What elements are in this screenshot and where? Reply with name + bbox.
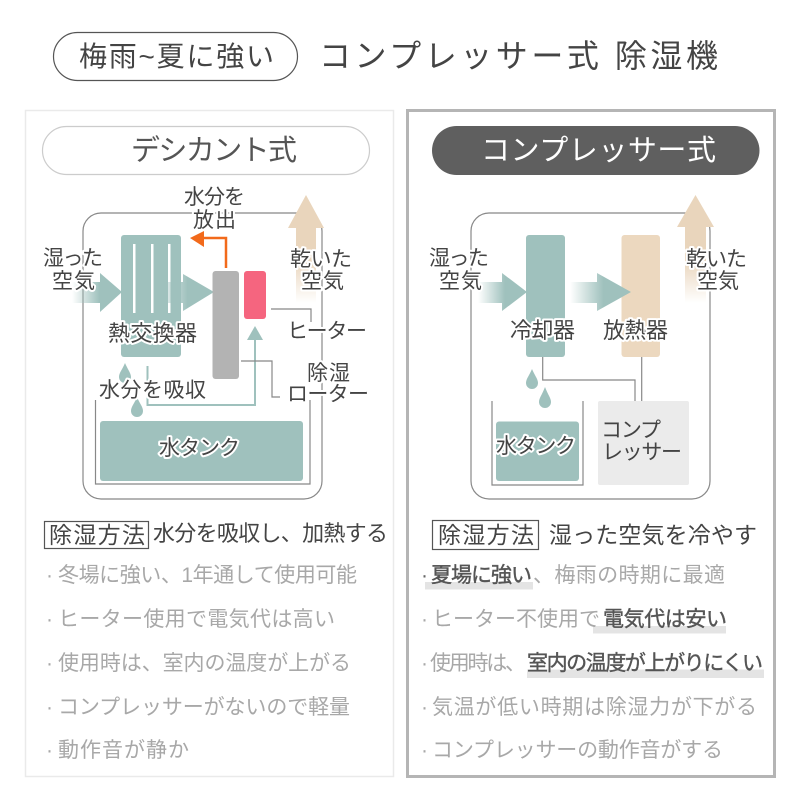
label: 水分を吸収: 水分を吸収	[99, 379, 206, 402]
label: 湿った空気	[43, 247, 103, 293]
method: 湿った空気を冷やす	[432, 520, 757, 550]
feature list: compressor: ·	[421, 564, 428, 587]
water drops	[119, 363, 143, 417]
label: 除湿ローター: 除湿	[307, 362, 350, 385]
method: 水分を吸収し、加熱する	[44, 521, 388, 548]
label: 水分を放出	[184, 186, 245, 232]
feature list: desiccant: コンプレッサーがないので軽量	[58, 696, 350, 719]
desiccant rotor	[212, 271, 239, 379]
panel: デシカント式	[26, 110, 394, 776]
water tank	[496, 422, 579, 481]
title pill: 梅雨~夏に強い	[54, 32, 298, 80]
title: コンプレッサー式 除湿機	[319, 38, 718, 74]
feature list: compressor: ヒーター不使用で	[432, 608, 600, 631]
label: 乾いた空気: 乾いた	[290, 248, 352, 271]
feature list: compressor: 気温が低い時期は除湿力が下がる	[432, 696, 757, 719]
label: コンプレッサー: レッサー	[602, 441, 682, 464]
feature list: compressor: 室内の温度が上がりにくい	[527, 652, 763, 675]
heading: デシカント式: デシカント式	[131, 134, 297, 167]
label: 乾いた空気: 空気	[697, 270, 739, 293]
label: 水タンク: 水タンク	[496, 435, 576, 458]
label: 湿った空気: 空気	[439, 270, 482, 293]
feature list: desiccant: ·	[46, 564, 53, 587]
arrow: air to radiator	[570, 273, 631, 311]
method: 湿った空気を冷やす: 除湿方法	[438, 522, 534, 548]
label: 湿った空気	[429, 247, 489, 293]
title pill: 梅雨~夏に強い: 梅雨~夏に強い	[79, 41, 274, 72]
label: 湿った空気: 湿った	[429, 247, 489, 270]
refrigerant lines	[543, 357, 642, 401]
diagram: desiccant dehumidifier	[43, 186, 369, 499]
heat exchanger	[121, 235, 181, 357]
feature list: desiccant: 動作音が静か	[58, 739, 189, 762]
feature list: desiccant: 冬場に強い、1年通して使用可能	[58, 564, 357, 587]
label: 乾いた空気: 空気	[301, 270, 344, 293]
feature list: compressor: 、梅雨の時期に最適	[533, 564, 725, 587]
label: 乾いた空気	[686, 248, 747, 293]
compressor box	[598, 401, 689, 485]
label: 水分を放出: 水分を	[184, 186, 245, 209]
tank enclosure	[96, 400, 310, 484]
label: 除湿ローター	[287, 362, 369, 406]
arrow: moisture absorption path	[148, 326, 263, 405]
heater	[244, 271, 266, 319]
heading: デシカント式	[42, 126, 370, 174]
method: 湿った空気を冷やす: 湿った空気を冷やす	[549, 522, 757, 548]
feature list: compressor: ·	[421, 739, 428, 762]
label: 放熱器: 放熱器	[603, 318, 668, 343]
label: 水タンク: 水タンク	[159, 437, 240, 460]
label: ヒーター: ヒーター	[287, 320, 367, 343]
arrow: humid air inlet	[478, 273, 527, 311]
feature list: compressor: ·	[421, 696, 428, 719]
feature list: compressor: コンプレッサーの動作音がする	[432, 739, 723, 762]
label: 除湿ローター: ローター	[287, 383, 369, 406]
tank enclosure	[492, 401, 583, 485]
cooler	[526, 235, 565, 357]
label: 乾いた空気: 乾いた	[686, 248, 747, 271]
arrow: dry air outlet	[288, 195, 324, 303]
water tank	[100, 421, 303, 481]
feature list: desiccant: ·	[46, 608, 53, 631]
feature list: compressor: ·	[421, 652, 428, 675]
heading: コンプレッサー式	[432, 126, 760, 175]
feature list: compressor: 夏場に強い	[431, 564, 532, 587]
arrow: dry air outlet	[677, 195, 714, 303]
label: 冷却器: 冷却器	[510, 318, 575, 343]
method: 水分を吸収し、加熱する: 除湿方法	[49, 522, 145, 548]
label: 水分を放出: 放出	[193, 209, 236, 232]
feature list: desiccant: 使用時は、室内の温度が上がる	[58, 652, 351, 675]
feature list: compressor: ·	[421, 608, 428, 631]
arrow: air through exchanger	[155, 274, 214, 311]
label: 乾いた空気	[290, 248, 352, 293]
label: コンプレッサー: コンプ	[601, 419, 661, 442]
leader lines	[241, 309, 311, 397]
panel: コンプレッサー式	[408, 110, 774, 776]
label: コンプレッサー	[601, 419, 682, 464]
water drops	[526, 369, 551, 408]
feature list: compressor: 使用時は、	[430, 652, 526, 675]
feature list: compressor	[421, 564, 764, 762]
heading: コンプレッサー式: コンプレッサー式	[481, 134, 716, 167]
label: 湿った空気: 湿った	[43, 247, 103, 270]
radiator	[622, 235, 660, 357]
method: 水分を吸収し、加熱する: 水分を吸収し、加熱する	[153, 521, 388, 546]
label: 熱交換器: 熱交換器	[108, 321, 197, 346]
feature list: compressor: 電気代は安い	[603, 608, 727, 631]
arrow: moisture released	[190, 231, 226, 268]
feature list: desiccant: ·	[46, 739, 53, 762]
feature list: desiccant: ·	[46, 696, 53, 719]
feature list: desiccant: ヒーター使用で電気代は高い	[58, 608, 335, 631]
feature list: desiccant: ·	[46, 652, 53, 675]
arrow: humid air inlet	[72, 273, 122, 312]
label: 湿った空気: 空気	[52, 270, 95, 293]
diagram: compressor dehumidifier	[429, 195, 747, 499]
highlights	[425, 582, 764, 678]
feature list: desiccant	[46, 564, 357, 762]
